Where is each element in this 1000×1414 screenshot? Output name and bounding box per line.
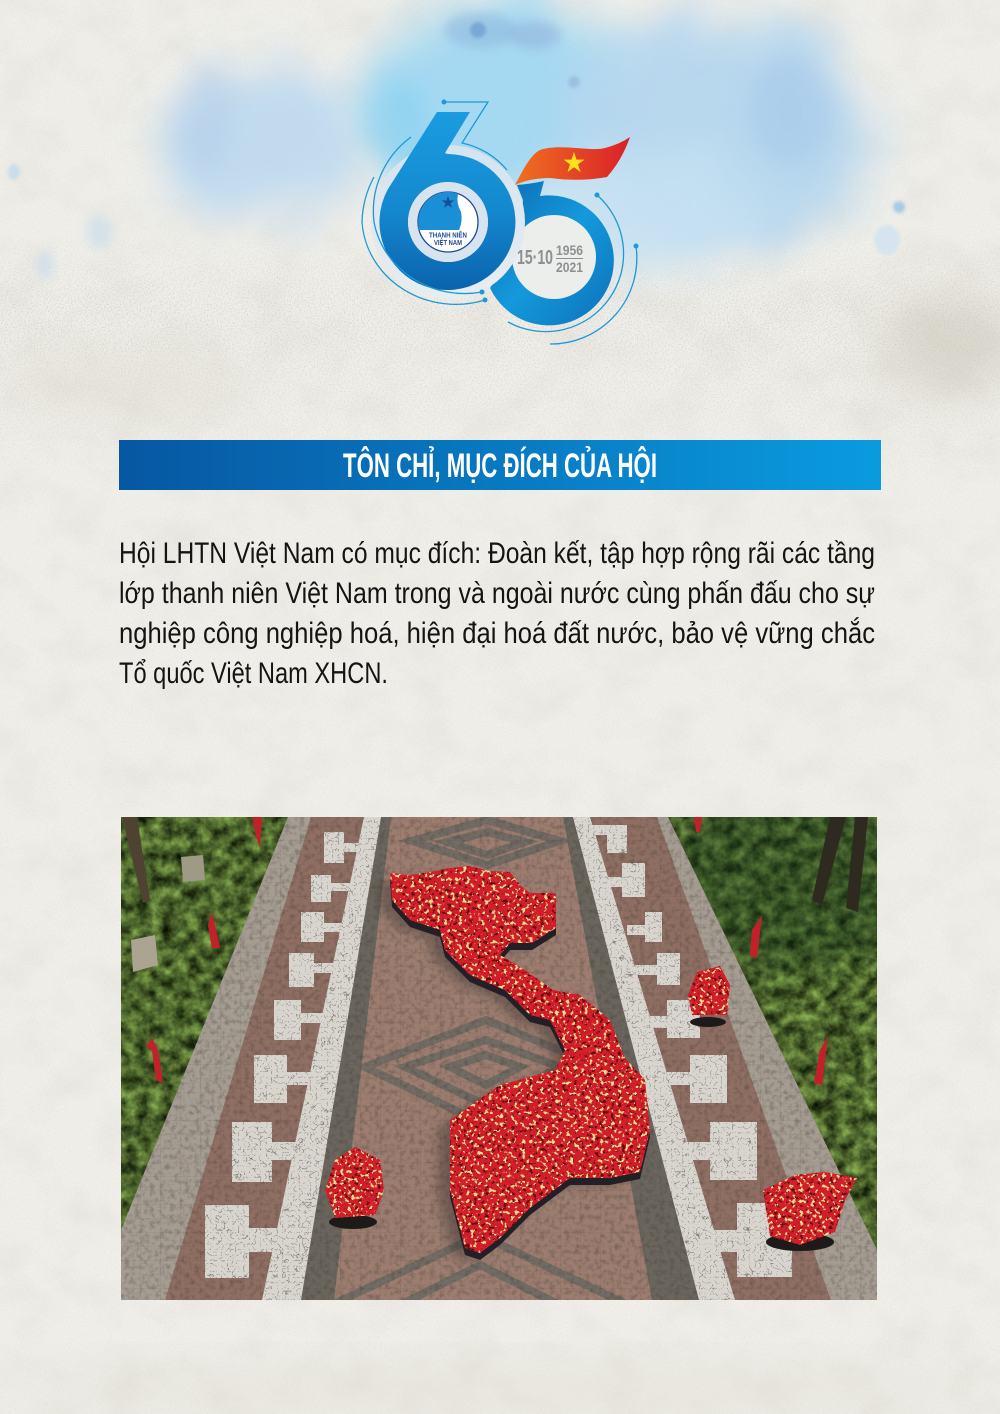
date text: [517, 242, 583, 275]
number 6: [379, 112, 515, 290]
diamond paving patterns: [334, 817, 627, 1300]
photo: youth forming the map of Vietnam: [121, 817, 877, 1300]
red flags: [146, 817, 828, 1085]
body text: Tổ quốc Việt Nam XHCN.: [119, 657, 388, 690]
body text: [119, 537, 875, 690]
halo around number 6: [371, 145, 525, 299]
brick joints and pavement noise: [121, 817, 877, 1300]
pavement base: [121, 817, 877, 1300]
crowd in the shape of Vietnam: [390, 866, 650, 1253]
people's legs under the crowd: [390, 873, 650, 1260]
white stone bands and key motifs: [205, 817, 792, 1300]
emblem: Thanh nien Viet Nam: THANH NIÊN: [429, 230, 467, 240]
logo: 65 years: [362, 100, 638, 344]
heading bar: TÔN CHỈ, MỤC ĐÍCH CỦA HỘI: [343, 446, 657, 485]
central dark bands: [299, 817, 702, 1300]
body text: lớp thanh niên Việt Nam trong và ngoài nước cùng phấn đấu cho sự: [119, 577, 875, 610]
date text: 15·10: [517, 247, 553, 269]
left brick strip: [165, 817, 366, 1300]
body text: nghiệp công nghiệp hoá, hiện đại hoá đất nước, bảo vệ vững chắc: [119, 617, 875, 650]
number 5: [490, 181, 614, 325]
central pavement: [334, 817, 652, 1300]
crowd shadow: [378, 874, 638, 1261]
heading bar: [119, 440, 881, 490]
grass and trees: [121, 817, 877, 1250]
thin orbit lines: [362, 100, 638, 344]
blue watercolor wash: [8, 0, 905, 279]
emblem: Thanh nien Viet Nam: VIỆT NAM: [434, 238, 462, 247]
right brick strip: [588, 817, 831, 1300]
date text: 2021: [556, 259, 583, 275]
groups of people: [325, 966, 857, 1251]
date text: 1956: [556, 242, 583, 258]
emblem: Thanh nien Viet Nam: [408, 182, 488, 262]
flag with star: [515, 137, 630, 185]
